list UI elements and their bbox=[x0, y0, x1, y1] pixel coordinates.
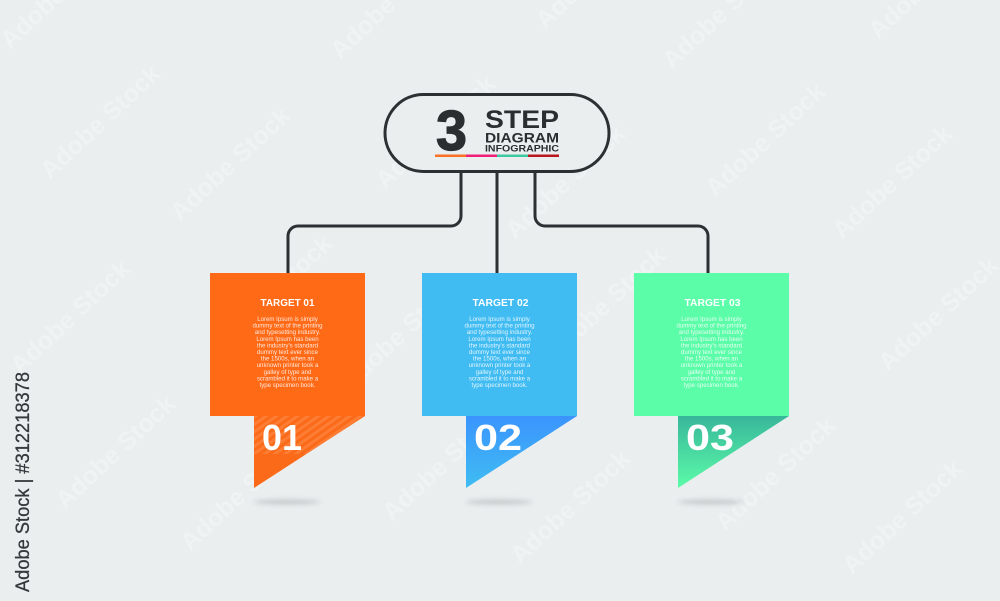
body text: the 1500s, when an bbox=[685, 356, 738, 363]
connector lines bbox=[288, 171, 708, 274]
heading: TARGET 01 bbox=[260, 297, 315, 309]
watermarks: Adobe Stock bbox=[370, 70, 501, 194]
colour underline bbox=[435, 154, 559, 157]
body text bbox=[252, 316, 323, 389]
shadow bbox=[466, 500, 532, 504]
title text: DIAGRAM bbox=[485, 130, 559, 146]
body text: dummy text ever since bbox=[469, 349, 531, 356]
body text: Lorem Ipsum has been bbox=[256, 336, 319, 343]
ribbon tail bbox=[678, 416, 789, 488]
body text: Lorem Ipsum is simply bbox=[469, 316, 531, 323]
panel: target 03 bbox=[634, 273, 789, 504]
heading: TARGET 03 bbox=[684, 297, 741, 309]
body text: galley of type and bbox=[264, 369, 311, 376]
card bbox=[210, 273, 365, 416]
watermarks: Adobe Stock bbox=[5, 255, 136, 379]
body text: galley of type and bbox=[476, 369, 523, 376]
body text bbox=[676, 316, 747, 389]
heading: TARGET 02 bbox=[472, 297, 529, 309]
body text: Lorem Ipsum has been bbox=[468, 336, 531, 343]
panel: target 01 bbox=[210, 273, 365, 504]
watermarks: Adobe Stock bbox=[335, 272, 466, 396]
watermarks: Adobe Stock bbox=[50, 390, 181, 514]
shadow bbox=[254, 500, 320, 504]
stock id side label: Adobe Stock | #312218378 bbox=[13, 372, 34, 592]
body text: type specimen book. bbox=[684, 382, 740, 389]
watermarks: Adobe Stock bbox=[837, 455, 968, 579]
card bbox=[634, 273, 789, 416]
body text: unknown printer took a bbox=[681, 362, 743, 369]
title text: STEP bbox=[485, 106, 559, 134]
body text: and typesetting industry. bbox=[255, 329, 321, 336]
watermarks: Adobe Stock bbox=[540, 242, 671, 366]
number: 02 bbox=[474, 417, 522, 458]
title numeral: 3 bbox=[436, 99, 467, 163]
body text: and typesetting industry. bbox=[679, 329, 745, 336]
body text: dummy text ever since bbox=[257, 349, 319, 356]
title text: INFOGRAPHIC bbox=[485, 144, 560, 154]
body text: type specimen book. bbox=[472, 382, 528, 389]
body text: Lorem Ipsum has been bbox=[680, 336, 743, 343]
body text: the industry's standard bbox=[681, 342, 742, 349]
watermarks: Adobe Stock bbox=[505, 445, 636, 569]
ribbon tail bbox=[254, 416, 365, 488]
body text: Lorem Ipsum is simply bbox=[681, 316, 743, 323]
number: 01 bbox=[262, 417, 302, 458]
card bbox=[422, 273, 577, 416]
number: 03 bbox=[686, 417, 734, 458]
shadow bbox=[678, 500, 744, 504]
body text: the industry's standard bbox=[469, 342, 530, 349]
body text bbox=[464, 316, 535, 389]
watermarks: Adobe Stock bbox=[873, 252, 1000, 376]
watermarks: Adobe Stock bbox=[165, 102, 296, 226]
watermarks: Adobe Stock bbox=[175, 432, 306, 556]
watermarks: Adobe Stock bbox=[710, 412, 841, 536]
body text: dummy text of the printing bbox=[464, 323, 535, 330]
body text: galley of type and bbox=[688, 369, 735, 376]
body text: the 1500s, when an bbox=[261, 356, 314, 363]
body text: type specimen book. bbox=[260, 382, 316, 389]
watermarks: Adobe Stock bbox=[827, 120, 958, 244]
body text: scrambled it to make a bbox=[257, 375, 319, 382]
title pill bbox=[385, 94, 609, 172]
body text: dummy text of the printing bbox=[252, 323, 323, 330]
body text: unknown printer took a bbox=[469, 362, 531, 369]
watermarks: Adobe Stock bbox=[207, 230, 338, 354]
body text: dummy text ever since bbox=[681, 349, 743, 356]
body text: the 1500s, when an bbox=[473, 356, 526, 363]
body text: scrambled it to make a bbox=[681, 375, 743, 382]
body text: the industry's standard bbox=[257, 342, 318, 349]
ribbon tail bbox=[466, 416, 577, 488]
body text: scrambled it to make a bbox=[469, 375, 531, 382]
body text: and typesetting industry. bbox=[467, 329, 533, 336]
body text: unknown printer took a bbox=[257, 362, 319, 369]
watermarks: Adobe Stock bbox=[700, 78, 831, 202]
watermarks: Adobe Stock bbox=[377, 402, 508, 526]
watermarks: Adobe Stock bbox=[500, 120, 631, 244]
panel: target 02 bbox=[422, 273, 577, 504]
watermarks: Adobe Stock bbox=[35, 60, 166, 184]
body text: Lorem Ipsum is simply bbox=[257, 316, 319, 323]
body text: dummy text of the printing bbox=[676, 323, 747, 330]
title text bbox=[485, 106, 560, 154]
